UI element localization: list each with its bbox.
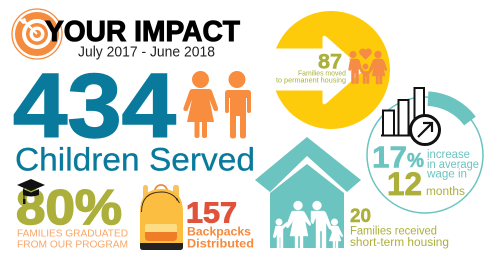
icon: family silhouette: [273, 201, 343, 248]
text: increase in average wage in: [426, 149, 479, 180]
text: backpacks distributed: Distributed: [187, 238, 254, 250]
icon: target with arrow: [12, 9, 62, 59]
stat: 434: 434: [13, 56, 176, 157]
icon: bar chart with arrow: [381, 88, 440, 144]
text: families graduated: [17, 228, 128, 250]
icon: house body: [270, 164, 344, 248]
panel: wage increase: [367, 88, 483, 213]
text: increase in average wage in: in average: [427, 159, 479, 171]
text: families moved: [276, 70, 346, 84]
text: increase in average wage in: wage in: [426, 168, 467, 180]
text: backpacks distributed: Backpacks: [187, 226, 251, 238]
title: YOUR IMPACT: [45, 16, 240, 48]
text: families received: short-term housing: [350, 237, 449, 249]
stat: 17%: %: [407, 150, 424, 172]
icon: girl and boy: [183, 71, 251, 138]
icon: house roof: [255, 137, 361, 192]
text: months: months: [426, 186, 465, 198]
text: families received: [350, 226, 449, 249]
date range: July 2017 - June 2018: [78, 44, 215, 60]
icon: girl: [183, 71, 218, 138]
stat: 12: 12: [387, 166, 422, 202]
text: backpacks distributed: [187, 226, 254, 250]
panel: permanent housing: [268, 11, 390, 129]
text: increase in average wage in: increase: [427, 149, 470, 161]
text: families moved: to permanent housing: [276, 78, 346, 84]
stat: 20: 20: [350, 206, 371, 227]
stat: 17%: 17: [372, 140, 407, 174]
icon: family with heart: [348, 49, 387, 84]
text: families moved: Families moved: [298, 70, 346, 78]
stat: 80%: 80%: [16, 181, 122, 235]
text: families received: Families received: [350, 226, 437, 238]
thin ring: [367, 97, 483, 213]
panel: short-term housing: [255, 137, 449, 249]
stat: 17%: [372, 140, 424, 174]
icon: graduation cap: [17, 179, 45, 204]
stat: 87: 87: [318, 50, 342, 74]
icon: backpack: [140, 185, 183, 250]
label: children served: Children Served: [15, 142, 255, 178]
thick progress arc: [428, 99, 470, 121]
yellow circle: [272, 11, 390, 129]
text: families graduated: FROM OUR PROGRAM: [17, 240, 128, 250]
white arrow: [268, 36, 362, 104]
icon: boy: [225, 71, 251, 138]
text: families graduated: FAMILIES GRADUATED: [17, 228, 128, 240]
stat: 157: 157: [186, 198, 237, 230]
